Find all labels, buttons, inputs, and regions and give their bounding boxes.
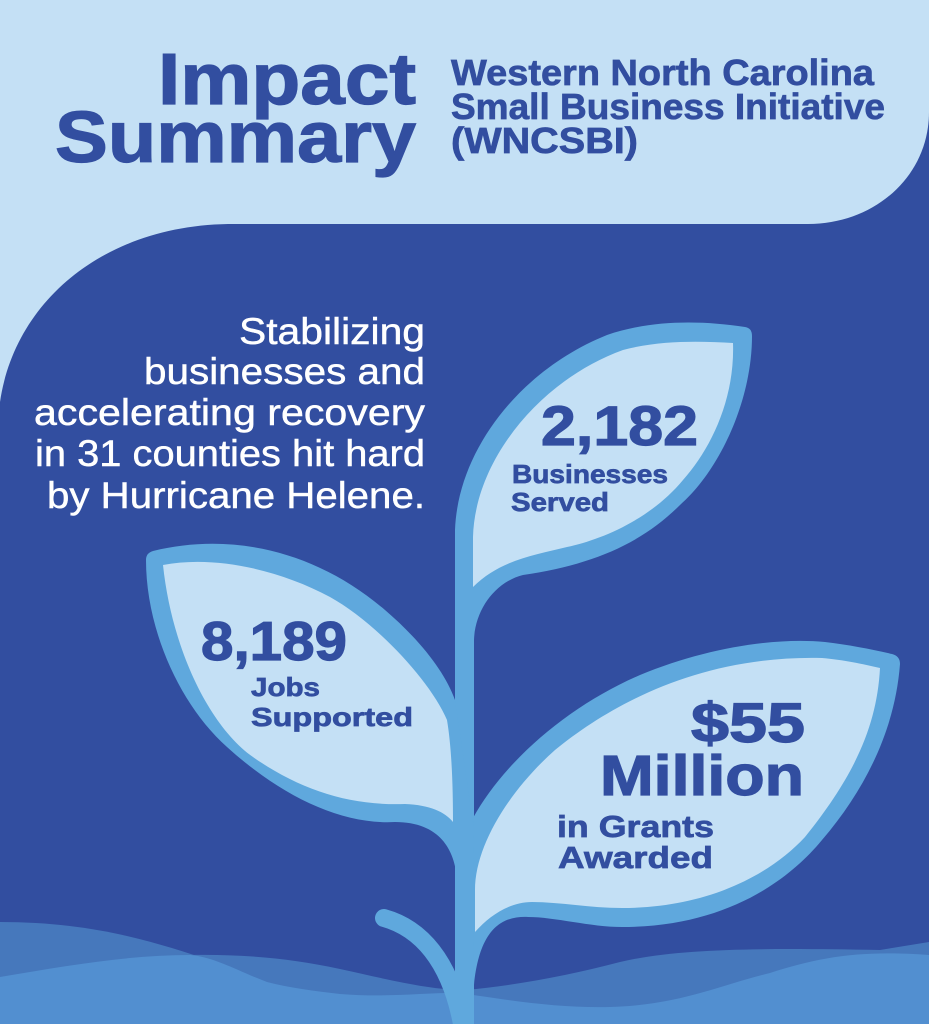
label: businesses served: Businesses [512,459,668,489]
text block: mission statement: Stabilizing [239,311,425,352]
label: in grants awarded: Awarded [558,840,713,875]
stat: $55 Million: $55 [691,691,805,754]
stat: 8,189: 8,189 [201,610,347,672]
label: jobs supported: Supported [251,702,413,732]
subtitle [451,52,885,161]
subtitle: Western North Carolina [451,52,875,93]
label: businesses served [511,459,668,517]
title: Summary [55,98,416,178]
text block: mission statement: businesses and [144,351,425,392]
waves [0,922,929,1024]
subtitle: Small Business Initiative [451,86,885,127]
text block: mission statement: accelerating recovery [34,392,426,433]
leaf: businesses served [455,322,752,640]
title [55,40,416,178]
label: in grants awarded: in Grants [557,809,714,844]
label: in grants awarded [557,809,714,875]
leaf: jobs supported [146,544,474,880]
text block: mission statement: in 31 counties hit hard [35,433,425,474]
panel: header [0,0,929,402]
title: Impact [158,40,416,120]
label: jobs supported [251,672,413,732]
plant stem and branch [384,560,474,1024]
panel: left corner [0,224,228,402]
subtitle: (WNCSBI) [451,120,638,161]
stat: $55 Million: Million [600,744,804,808]
label: businesses served: Served [511,487,609,517]
text block: mission statement: by Hurricane Helene. [47,475,425,516]
leaf: grants awarded [473,641,900,985]
label: jobs supported: Jobs [251,672,320,702]
stat: $55 Million [600,691,805,808]
text block: mission statement [34,311,426,516]
stat: 2,182: 2,182 [541,394,698,457]
